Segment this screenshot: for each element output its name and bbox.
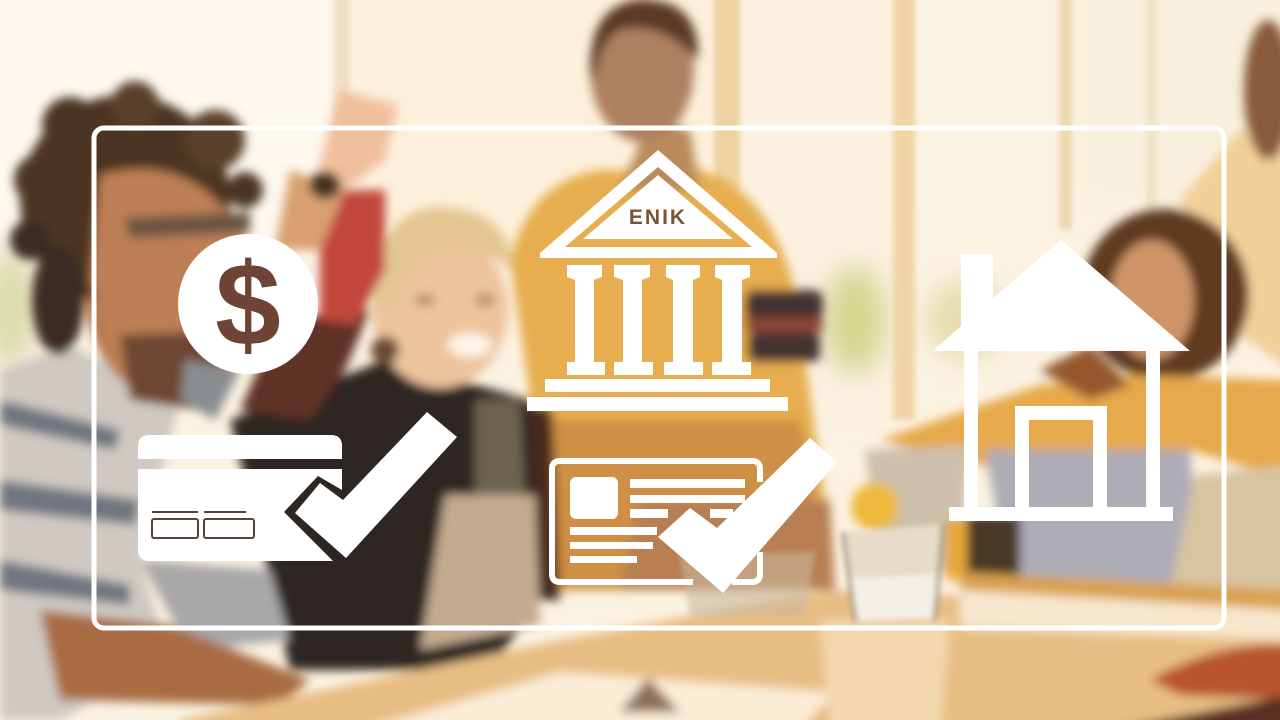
icon: credit card with check mark xyxy=(138,412,457,561)
icon: dollar coin xyxy=(178,234,318,374)
far right person xyxy=(1180,130,1280,370)
right woman xyxy=(1081,209,1249,381)
icon: bank building: ENIK xyxy=(629,206,687,229)
rounded frame xyxy=(94,128,1224,628)
left man xyxy=(0,345,180,720)
water glass xyxy=(680,524,943,622)
icon: bank building xyxy=(527,150,788,411)
icon: ID card with check mark xyxy=(552,438,837,593)
icon: house xyxy=(933,240,1190,521)
boy xyxy=(230,360,540,670)
table xyxy=(180,590,1280,720)
icon: dollar coin: $ xyxy=(215,239,281,371)
raised arm and red object xyxy=(275,170,345,250)
center man xyxy=(510,170,835,590)
glass and yellow fruit xyxy=(851,483,899,531)
